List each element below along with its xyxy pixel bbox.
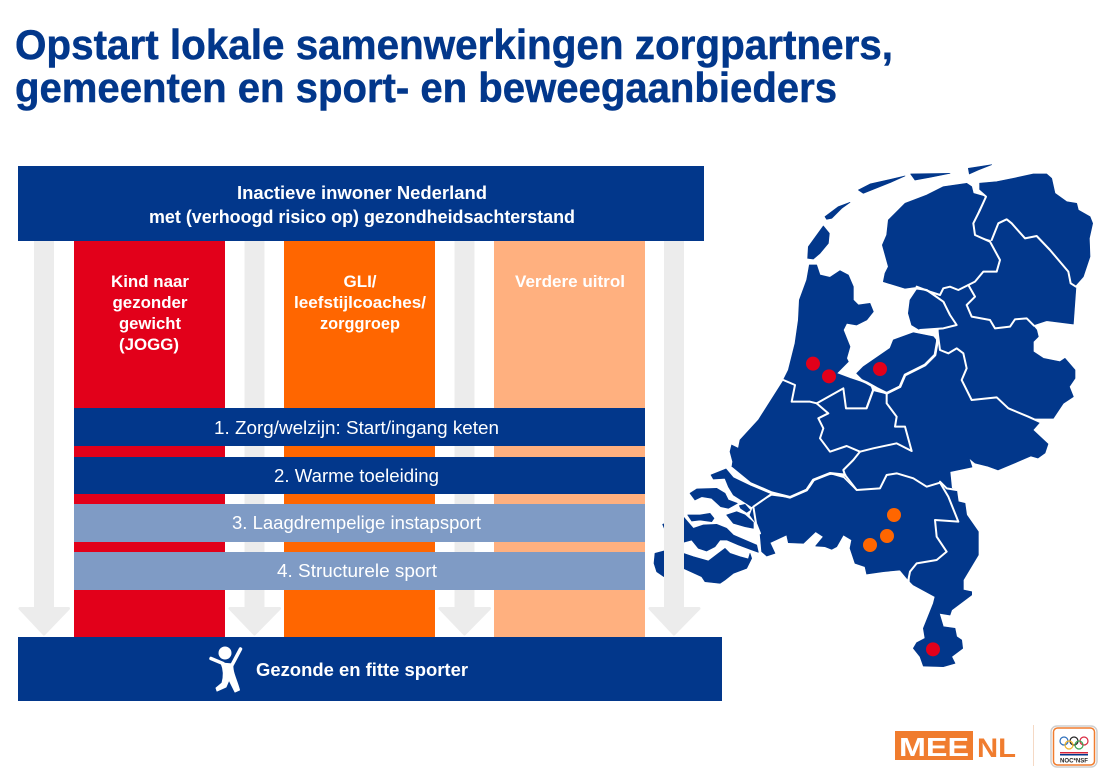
province: Zeeland <box>654 469 771 583</box>
arrow 3 <box>440 241 490 634</box>
dots: red pilot locations <box>806 357 940 656</box>
column: Verdere uitrol <box>494 241 645 637</box>
column: GLI: leefstijlcoaches/ <box>294 293 426 312</box>
province: Utrecht <box>817 388 912 452</box>
province: Overijssel <box>932 285 1075 418</box>
bottom bar: outcome <box>18 637 722 701</box>
column: Kind naar gezonder gewicht: Kind naar <box>111 272 189 291</box>
column: GLI: GLI/ <box>343 272 377 291</box>
column: GLI <box>284 241 435 637</box>
column: Kind naar gezonder gewicht: (JOGG) <box>119 335 179 354</box>
bar 3 <box>74 504 645 542</box>
arrow 1 <box>20 241 68 634</box>
column: Kind naar gezonder gewicht <box>74 241 225 637</box>
province: Limburg <box>910 482 978 667</box>
bar 3: 3. Laagdrempelige instapsport <box>232 512 481 533</box>
column: Kind naar gezonder gewicht: gezonder <box>112 293 188 312</box>
province: Groningen <box>973 174 1093 286</box>
column: Verdere uitrol: Verdere uitrol <box>515 272 625 291</box>
logo: NOC*NSF <box>1051 726 1097 767</box>
Wadden islands <box>808 165 992 259</box>
province: Flevoland <box>857 333 937 392</box>
bar 1 <box>74 408 645 446</box>
bar 2: 2. Warme toeleiding <box>274 465 439 486</box>
arrow 2 <box>230 241 280 634</box>
logo: MEE NL: MEE <box>899 732 969 762</box>
title: Opstart lokale samenwerkingen zorgpartners, <box>15 21 893 68</box>
province: Drenthe <box>967 219 1076 328</box>
province: Noordoostpolder <box>908 290 957 330</box>
title: gemeenten en sport- en beweegaanbieders <box>15 64 837 111</box>
bar 1: 1. Zorg/welzijn: Start/ingang keten <box>214 417 499 438</box>
logo: MEE NL: NL <box>977 733 1016 763</box>
logo: NOC*NSF: NOC*NSF <box>1060 758 1088 764</box>
bar 4: 4. Structurele sport <box>277 560 437 581</box>
bar 2 <box>74 457 645 494</box>
icon: jumping figure <box>211 646 240 692</box>
bottom bar: outcome: Gezonde en fitte sporter <box>256 660 468 680</box>
province: Gelderland <box>843 330 1048 490</box>
province: Noord-Holland <box>783 265 873 408</box>
top bar: target group: Inactieve inwoner Nederland <box>237 183 487 203</box>
top bar: target group: met (verhoogd risico op) gezondheidsachterstand <box>149 207 575 227</box>
arrow 4 <box>650 241 699 634</box>
province: Noord-Brabant <box>750 473 958 580</box>
column: Kind naar gezonder gewicht: gewicht <box>119 314 181 333</box>
top bar: target group <box>18 166 704 241</box>
logo: MEE NL <box>895 731 1016 763</box>
bar 4 <box>74 552 645 590</box>
dots: orange pilot locations <box>863 508 901 552</box>
province: Friesland <box>882 183 1000 295</box>
province: Zuid-Holland <box>730 381 860 497</box>
column: GLI: zorggroep <box>320 314 400 333</box>
title <box>15 21 893 111</box>
map of the Netherlands <box>654 165 1093 667</box>
